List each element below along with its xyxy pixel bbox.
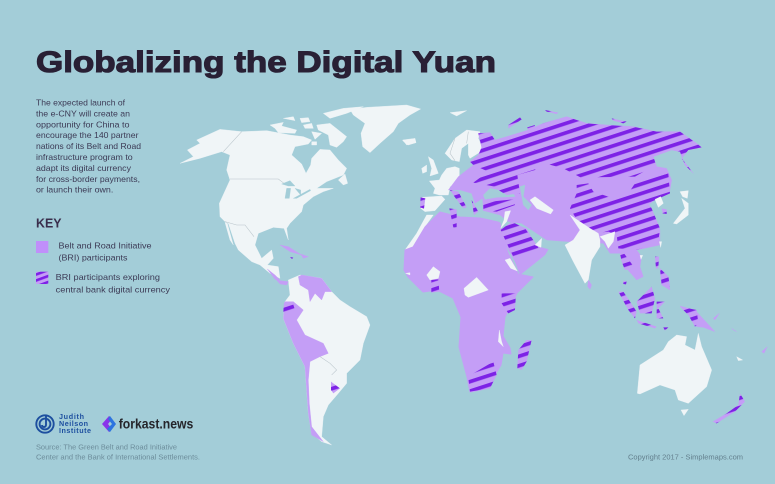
intro text block: or launch their own. (36, 186, 113, 195)
legend: BRI participants exploring CBDC: BRI participants exploring (56, 273, 160, 282)
intro text block: opportunity for China to (36, 120, 130, 129)
legend: BRI participants: (BRI) participants (58, 254, 128, 263)
intro text block (36, 98, 141, 195)
intro text block: adapt its digital currency (36, 164, 132, 173)
intro text block: infrastructure program to (36, 153, 133, 162)
logo: Judith Neilson Institute: Institute (59, 426, 91, 435)
Arabia (501, 223, 548, 275)
non-participant overlays (501, 191, 688, 283)
intro text block: for cross-border payments, (36, 175, 140, 184)
copyright: Copyright 2017 - Simplemaps.com (628, 452, 743, 461)
source note: Center and the Bank of International Settlements. (36, 453, 200, 462)
icon: diamond chevrons (102, 416, 116, 432)
legend: BRI participants exploring CBDC: central bank digital currency (56, 285, 171, 294)
icon: concentric arcs (36, 415, 54, 433)
intro text block: the e-CNY will create an (36, 109, 130, 118)
logo: Judith Neilson Institute: Neilson (59, 419, 88, 428)
Eurasia (403, 111, 767, 361)
logo: forkast.news: forkast.news (119, 416, 193, 432)
Philippines base (660, 268, 670, 290)
Sri Lanka, New Guinea and Pacific islands (588, 280, 767, 361)
source note: Source: The Green Belt and Road Initiative (36, 443, 177, 452)
world map (180, 104, 768, 446)
intro text block: encourage the 140 partner (36, 131, 139, 140)
title: Globalizing the Digital Yuan (36, 46, 496, 79)
logo: Judith Neilson Institute: Judith (59, 412, 84, 421)
logo: Judith Neilson Institute (36, 412, 91, 435)
Australia (637, 333, 712, 416)
intro text block: The expected launch of (36, 98, 126, 108)
Africa (404, 212, 533, 392)
South America (273, 275, 370, 445)
hatched regions: BRI participants exploring digital currency (283, 110, 745, 424)
North America and Greenland (180, 105, 421, 280)
intro text block: nations of its Belt and Road (36, 142, 141, 151)
key heading: KEY (36, 216, 62, 230)
legend: BRI participants: Belt and Road Initiative (58, 241, 152, 250)
source note (36, 443, 200, 462)
legend: BRI participants exploring CBDC (36, 272, 171, 294)
legend: BRI participants (36, 241, 152, 263)
